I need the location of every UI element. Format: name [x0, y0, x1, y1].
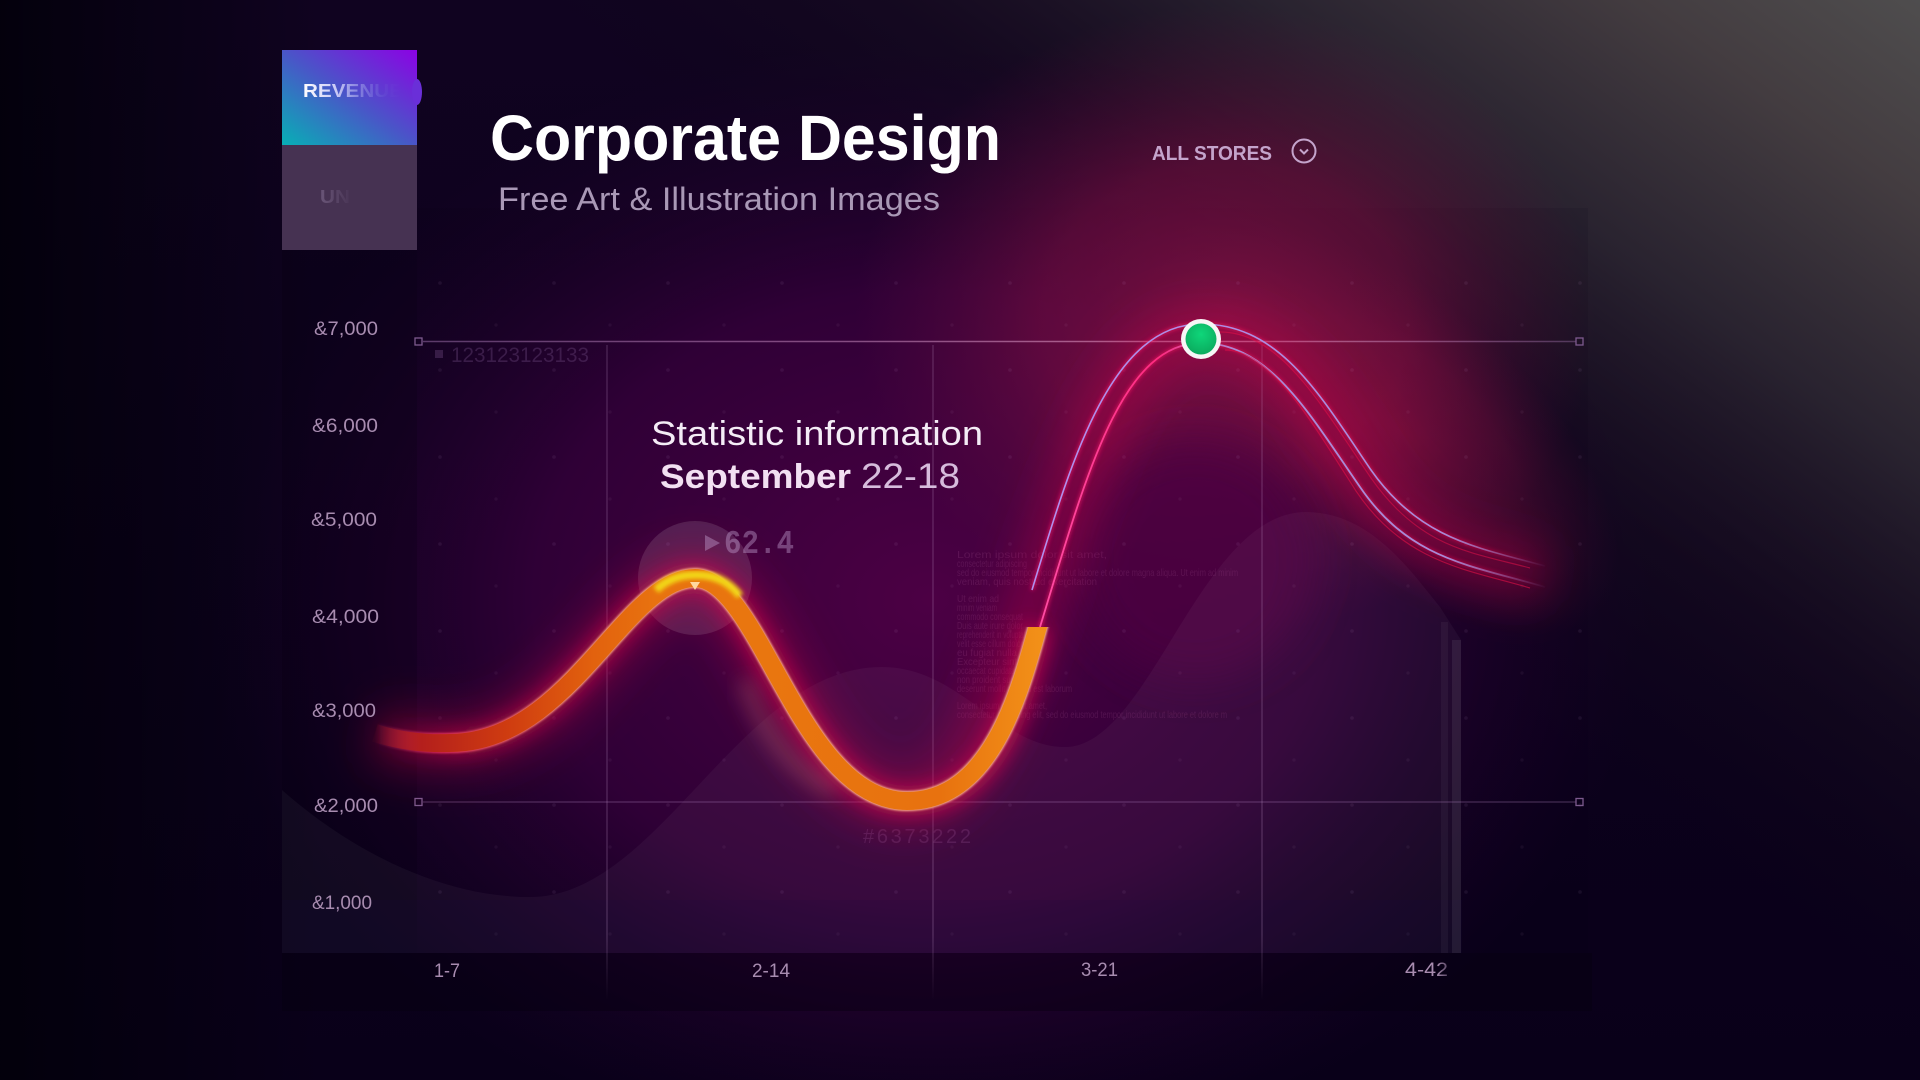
pale haze below descending band	[745, 680, 835, 790]
x axis labels: 3-21	[1081, 960, 1118, 981]
faint data labels	[435, 344, 971, 848]
statistic heading: Statistic information	[651, 415, 983, 453]
y axis labels: &6,000	[312, 416, 378, 437]
subtitle: Free Art & Illustration Images	[498, 181, 940, 217]
statistic heading	[651, 415, 983, 496]
title: Corporate Design	[490, 102, 1001, 174]
faint lorem ipsum text block: Lorem ipsum dolor sit amet,	[957, 549, 1107, 561]
faint lorem ipsum text block: velit esse cillum dolore	[957, 638, 1027, 650]
y axis labels: &1,000	[312, 893, 372, 914]
y axis labels: &4,000	[312, 607, 379, 628]
lower thin line	[1040, 343, 1545, 627]
revenue tab	[282, 50, 422, 145]
yellow peak highlight	[656, 575, 740, 596]
faint lorem ipsum text block: eu fugiat nulla	[957, 647, 1017, 659]
y axis labels: &7,000	[314, 319, 378, 340]
faint lorem ipsum text block: reprehenderit in voluptate	[957, 629, 1029, 641]
x axis labels: 4-42	[1405, 960, 1448, 981]
thick orange band	[375, 578, 1046, 801]
faint lorem ipsum text block: Duis aute irure dolor	[957, 620, 1023, 632]
faint lorem ipsum text block: Lorem ipsum dolor sit amet,	[957, 700, 1047, 712]
faint lorem ipsum text block: consectetur adipiscing elit, sed do eiusmod tempor incididunt ut labore et dolore m	[957, 709, 1227, 721]
units tab	[282, 145, 417, 250]
faint lorem ipsum text block: deserunt mollit anim id est laborum	[957, 683, 1072, 695]
faint lorem ipsum text block: Excepteur sint	[957, 656, 1017, 668]
faint lorem ipsum text block: occaecat cupidatat	[957, 665, 1017, 677]
revenue line chart	[375, 324, 1545, 801]
statistic heading: September	[660, 458, 851, 496]
faint lorem ipsum text block: consectetur adipiscing	[957, 558, 1027, 570]
y axis labels: &2,000	[314, 796, 378, 817]
statistic heading: 22-18	[861, 457, 960, 496]
highlight circle	[638, 521, 752, 635]
faint lorem ipsum text block: minim veniam	[957, 602, 997, 614]
background mountain shape	[282, 512, 1462, 953]
units tab: UN	[320, 187, 350, 207]
faint lorem ipsum text block: non proident sunt	[957, 674, 1017, 686]
faint lorem ipsum text block: veniam, quis nostrud exercitation	[957, 576, 1097, 588]
x axis labels: 2-14	[752, 961, 790, 982]
y axis labels: &3,000	[312, 701, 376, 722]
faint lorem ipsum text block: Ut enim ad	[957, 593, 999, 605]
upper thin line	[1032, 324, 1545, 590]
y axis labels: &5,000	[311, 510, 377, 531]
faint data labels: #6373222	[863, 826, 971, 848]
value callout 62.4: 62.4	[724, 526, 794, 563]
x axis labels: 1-7	[434, 961, 460, 982]
faint lorem ipsum text block	[957, 549, 1238, 721]
icon: chevron circle	[1292, 140, 1316, 162]
revenue tab: REVENUE	[303, 81, 403, 101]
x axis labels	[434, 960, 1448, 982]
faint data labels: 123123123133	[451, 344, 589, 367]
all stores dropdown: ALL STORES	[1152, 142, 1272, 165]
grid lines	[415, 338, 1583, 1000]
faint lorem ipsum text block: sed do eiusmod tempor incididunt ut labore et dolore magna aliqua. Ut enim ad minim	[957, 567, 1238, 579]
faint lorem ipsum text block: commodo consequat	[957, 611, 1023, 623]
y axis labels	[311, 319, 379, 914]
curve glow	[375, 324, 1545, 801]
peak marker	[1181, 319, 1221, 359]
